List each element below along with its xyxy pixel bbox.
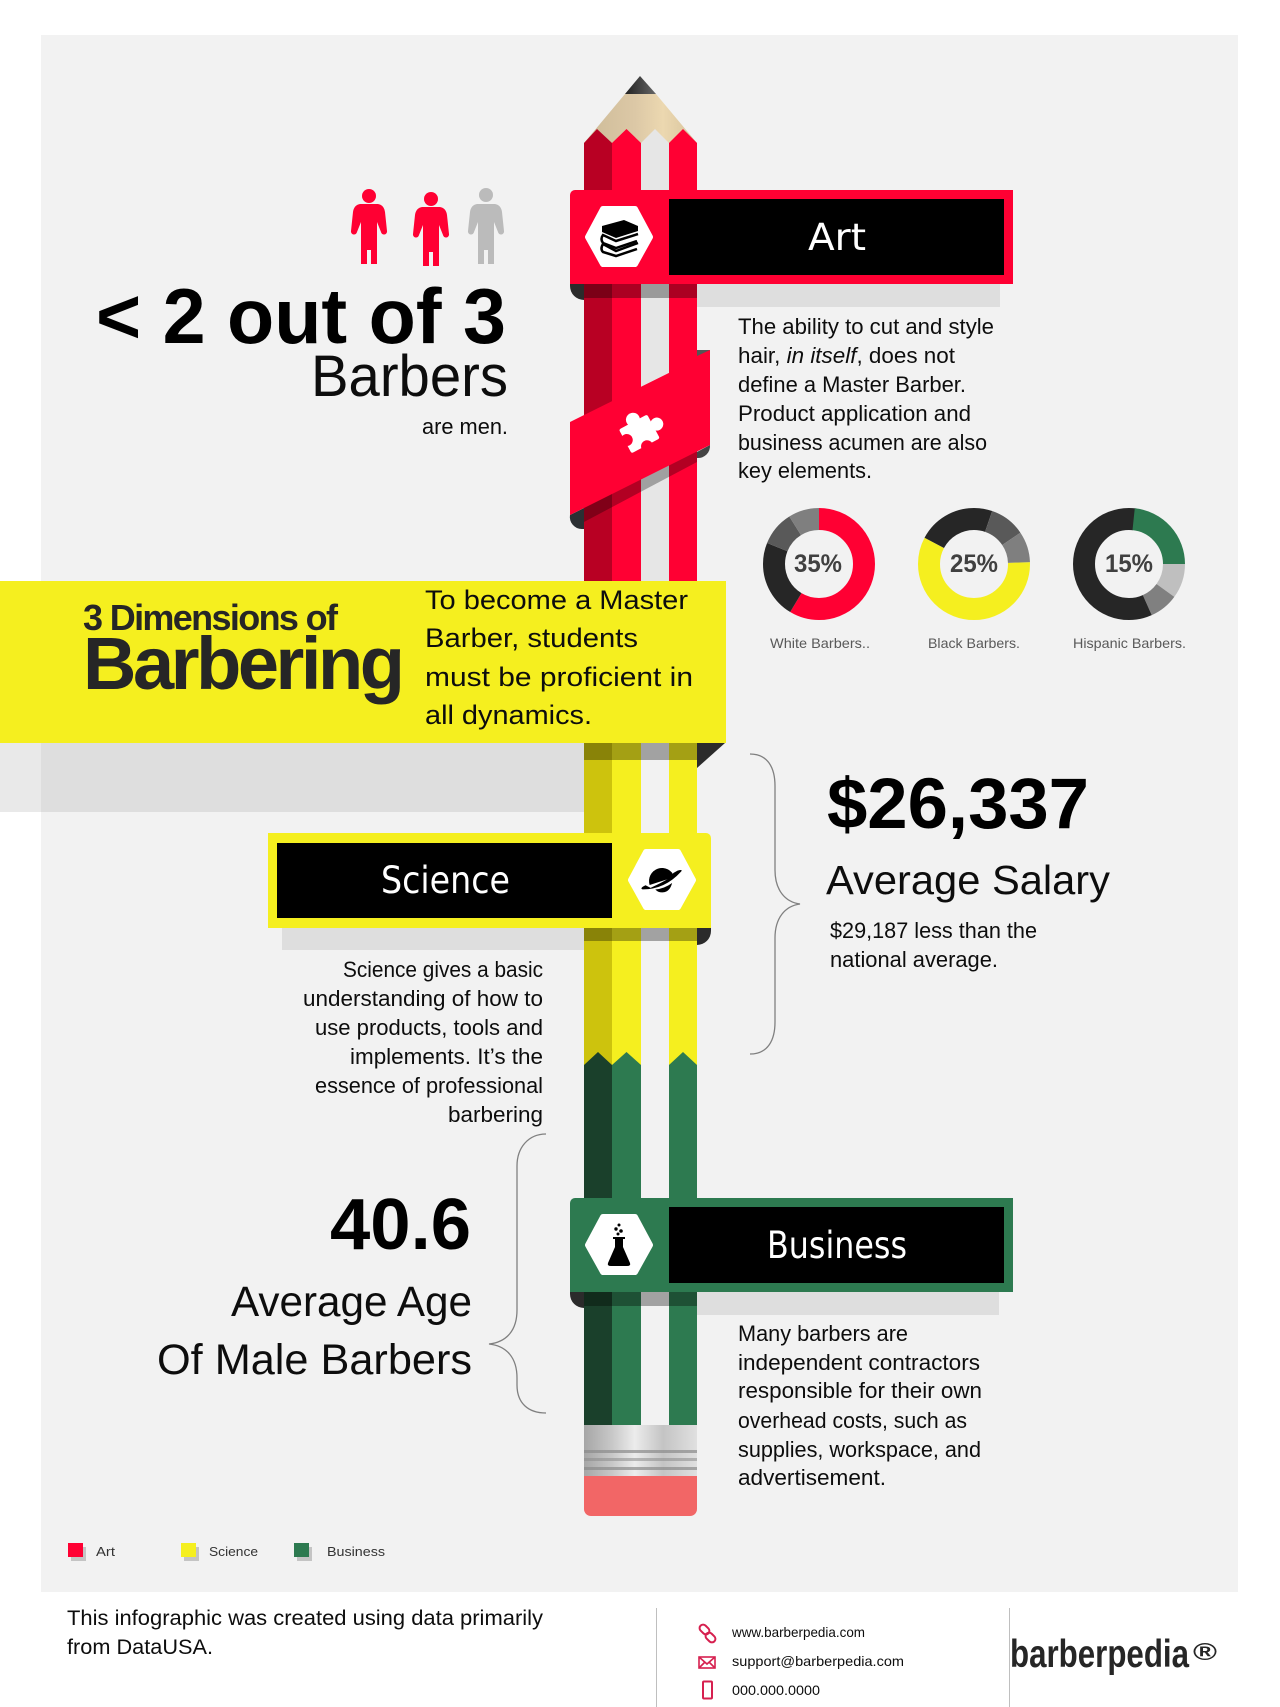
band: business	[570, 1198, 1013, 1308]
text: science description: barbering	[448, 1102, 543, 1127]
icons: barber gender people	[351, 188, 504, 266]
donut chart: hispanic barbers	[1073, 519, 1186, 651]
icon: envelope	[699, 1657, 715, 1668]
footer: source note: This infographic was created using data primarily	[67, 1607, 544, 1630]
text: business description: responsible for their own	[738, 1378, 982, 1403]
intro text: must be proficient in	[425, 662, 693, 692]
pencil green section	[584, 1052, 697, 1425]
stat: average age: 40.6	[330, 1185, 471, 1265]
legend: Science	[209, 1544, 258, 1559]
text: art description: key elements.	[738, 458, 872, 483]
text: science description: essence of professional	[315, 1073, 543, 1098]
yellow banner	[0, 581, 726, 768]
text: art description: business acumen are also	[738, 430, 987, 455]
donut chart: white barbers: White Barbers..	[770, 635, 870, 651]
pencil illustration	[584, 76, 697, 1516]
shadow: business band	[697, 1292, 999, 1315]
stat: average salary	[826, 765, 1111, 972]
logo: barberpedia: ®	[1193, 1639, 1217, 1666]
stat: average age: Average Age	[231, 1278, 472, 1326]
pencil ferrule	[584, 1425, 697, 1476]
text: business description	[738, 1321, 982, 1490]
donut chart: black barbers: Black Barbers.	[928, 635, 1020, 651]
icon: puzzle piece	[611, 402, 672, 461]
stat: average salary: $29,187 less than the	[830, 918, 1037, 943]
footer: contact details: support@barberpedia.com	[732, 1653, 904, 1669]
legend: Business	[327, 1544, 386, 1559]
icon: flask	[608, 1224, 630, 1266]
text: science description: understanding of how to	[303, 986, 543, 1011]
text: science description: Science gives a basic	[343, 957, 543, 982]
donut chart: white barbers	[770, 519, 870, 651]
text: science description: implements. It’s the	[350, 1044, 543, 1069]
footer: contact details: www.barberpedia.com	[731, 1624, 865, 1640]
stat: gender share: < 2 out of 3	[96, 272, 506, 360]
intro text: Barber, students	[425, 623, 638, 653]
stat: average salary: $26,337	[827, 765, 1089, 844]
icon: planet	[637, 862, 686, 899]
pencil tip	[625, 76, 656, 94]
logo: barberpedia: barberpedia	[1010, 1633, 1189, 1676]
intro text	[425, 585, 693, 730]
band: science	[268, 833, 711, 945]
intro text: all dynamics.	[425, 700, 592, 730]
text: science description	[303, 957, 543, 1127]
title: Barbering	[83, 622, 405, 705]
text: business description: overhead costs, such as	[738, 1408, 967, 1433]
stat: gender share: Barbers	[311, 344, 508, 409]
brace: age	[489, 1134, 546, 1413]
donut chart: black barbers: 25%	[950, 550, 998, 578]
heading: art: Art	[808, 216, 866, 259]
stat: average salary: national average.	[830, 947, 998, 972]
footer: contact details	[698, 1623, 904, 1698]
pencil red section	[584, 129, 697, 590]
shadow: yellow banner	[41, 743, 584, 812]
text: business description: supplies, workspace, and	[738, 1437, 981, 1462]
footer: source note: from DataUSA.	[67, 1636, 213, 1659]
intro text: To become a Master	[425, 585, 688, 615]
legend: Art	[96, 1544, 115, 1559]
text: science description: use products, tools and	[315, 1015, 543, 1040]
pencil eraser	[584, 1476, 697, 1516]
title: 3 Dimensions of	[83, 597, 339, 638]
text: business description: Many barbers are	[738, 1321, 908, 1346]
stat: gender share	[96, 272, 508, 439]
text: art description: Product application and	[738, 401, 971, 426]
stat: average age: Of Male Barbers	[157, 1336, 472, 1384]
heading: business: Business	[767, 1224, 907, 1267]
pencil wood	[584, 94, 697, 143]
text: art description: define a Master Barber.	[738, 372, 966, 397]
text: art description	[738, 314, 994, 483]
donut chart: hispanic barbers: 15%	[1105, 550, 1153, 578]
icon: link	[698, 1623, 717, 1644]
stat: gender share: are men.	[422, 414, 508, 439]
heading: science: Science	[381, 859, 510, 902]
shadow: yellow banner left bleed	[0, 743, 41, 812]
donut chart: black barbers	[928, 519, 1020, 651]
stat: average age	[157, 1185, 472, 1384]
legend	[68, 1543, 386, 1561]
text: art description: The ability to cut and style	[738, 314, 994, 339]
text: business description: independent contractors	[738, 1350, 980, 1375]
donut chart: hispanic barbers: Hispanic Barbers.	[1073, 635, 1186, 651]
icon: books	[602, 220, 638, 256]
footer: source note	[67, 1607, 544, 1659]
shadow: science band	[282, 928, 584, 950]
ribbon with puzzle icon	[570, 350, 710, 529]
text: art description: hair, in itself, does not	[738, 343, 955, 368]
pencil yellow section	[584, 740, 697, 1070]
text: business description: advertisement.	[738, 1465, 886, 1490]
shadow: art band	[697, 284, 1000, 307]
brace: salary	[750, 754, 800, 1054]
donut chart: white barbers: 35%	[794, 550, 842, 578]
band: art	[570, 190, 1013, 300]
footer: contact details: 000.000.0000	[732, 1682, 820, 1698]
icon: phone	[703, 1682, 712, 1698]
stat: average salary: Average Salary	[826, 857, 1111, 903]
